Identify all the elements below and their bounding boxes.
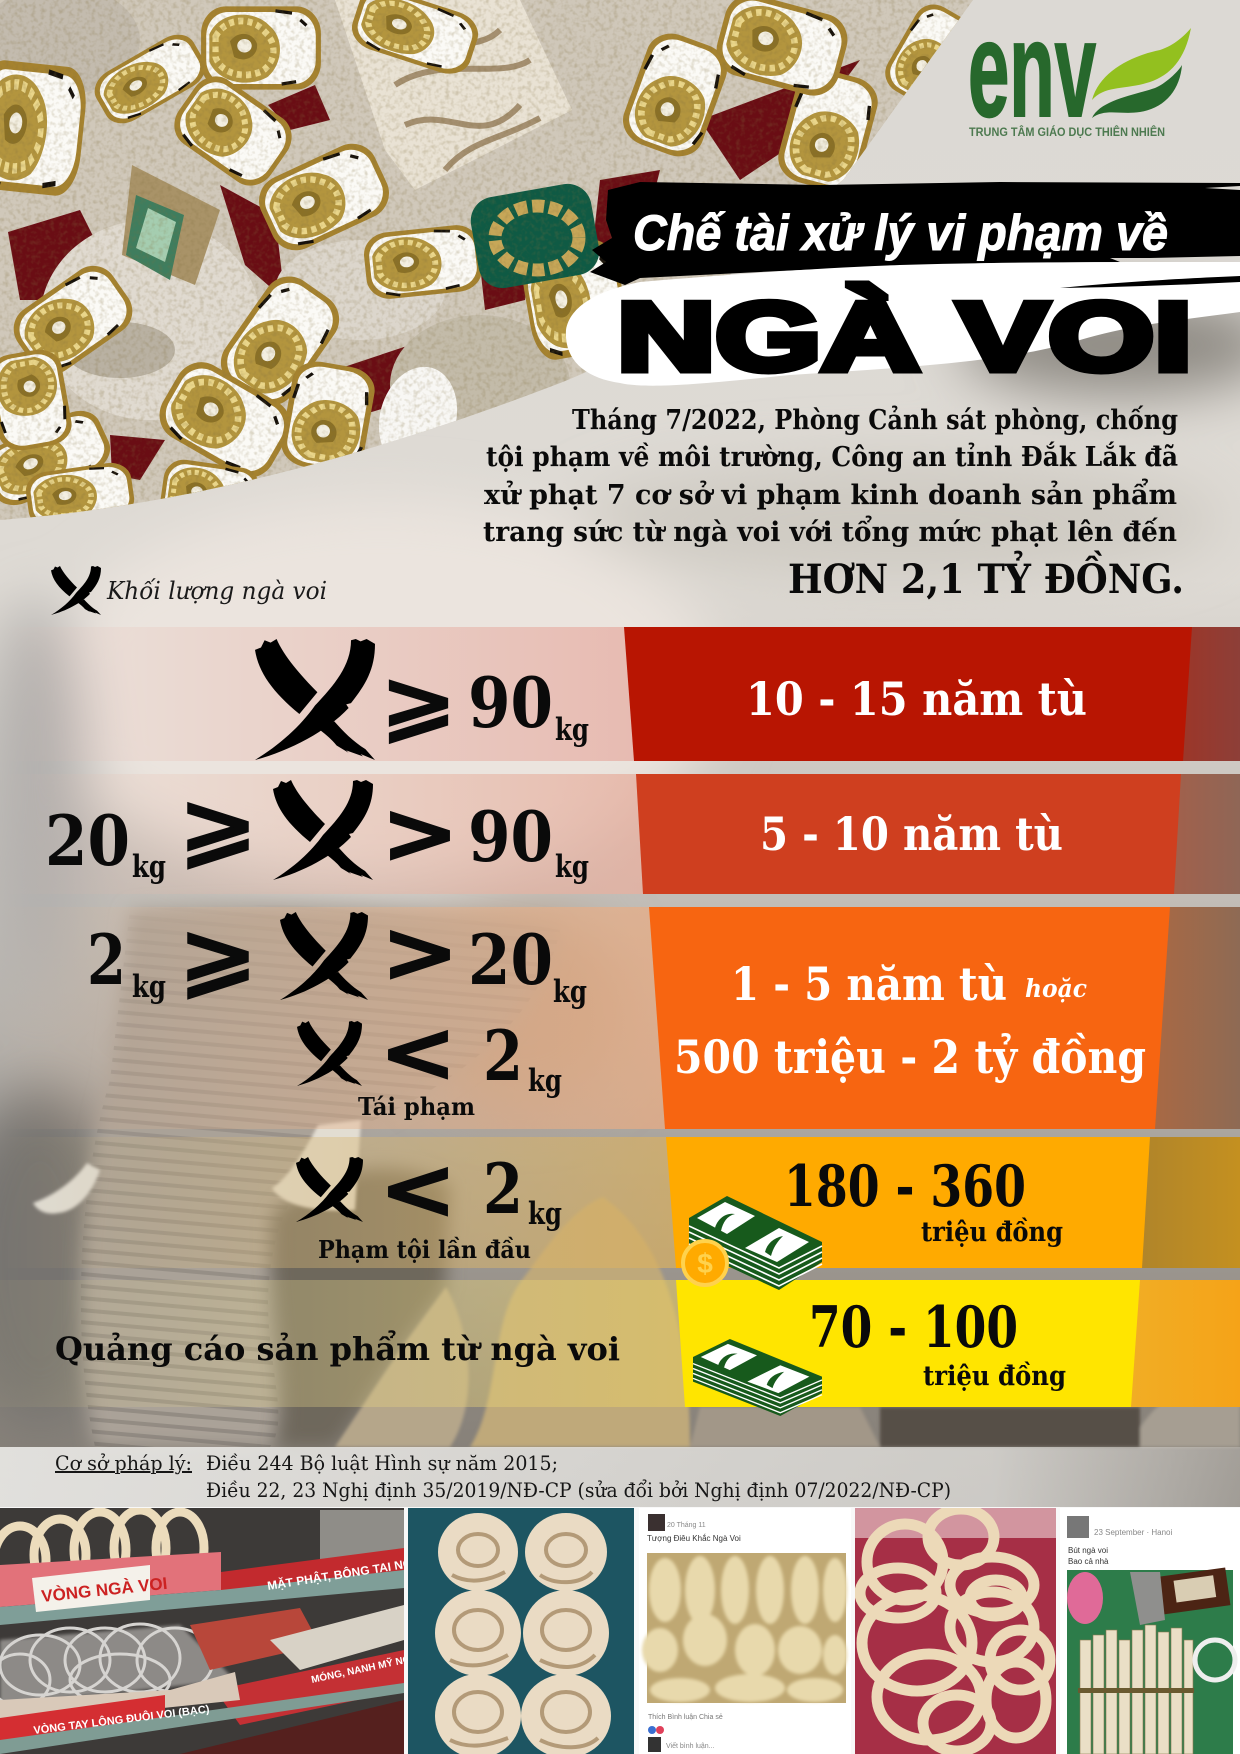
carved ivory	[0, 0, 572, 429]
intro paragraph: tội phạm về môi trường, Công an tỉnh Đắk Lắk đã	[486, 440, 1178, 473]
row 3: 2 to 20 kg or repeat offence: kg	[132, 969, 166, 1005]
dark gap behind trunk	[271, 1169, 450, 1447]
row 1: 90 kg and over: ⩾	[380, 657, 457, 750]
row 2: 20 to 90 kg: 5 - 10 năm tù	[760, 807, 1063, 861]
shop label: MẶT PHẬT, BÔNG TAI NGÀ VOI	[266, 1550, 445, 1593]
icon: green leaf	[1092, 28, 1191, 118]
row 5: advertising ivory: 70 - 100	[809, 1294, 1018, 1361]
legal basis: Điều 22, 23 Nghị định 35/2019/NĐ-CP (sửa đổi bởi Nghị định 07/2022/NĐ-CP)	[206, 1478, 951, 1502]
legal basis: Điều 244 Bộ luật Hình sự năm 2015;	[206, 1451, 558, 1475]
photo: social post of statues: 20 Tháng 11	[667, 1522, 706, 1529]
row 3: 2 to 20 kg or repeat offence: kg	[553, 974, 587, 1010]
penalty box	[666, 1137, 1150, 1268]
row 3: 2 to 20 kg or repeat offence: ⩾	[178, 908, 258, 1006]
row 3: 2 to 20 kg or repeat offence: 1 - 5 năm tù	[731, 957, 1007, 1011]
row 5: advertising ivory	[0, 1280, 1240, 1407]
shop sign: VÒNG NGÀ VOI	[40, 1574, 168, 1606]
row 3: 2 to 20 kg or repeat offence: hoặc	[1025, 974, 1087, 1003]
row 4: under 2 kg first offence: <	[379, 1140, 457, 1238]
row 3: 2 to 20 kg or repeat offence: >	[381, 903, 459, 1001]
white brush stroke	[566, 262, 1240, 386]
photo: ivory rings and carvings	[0, 0, 1000, 533]
row 5: advertising ivory: triệu đồng	[923, 1360, 1066, 1392]
row 3: 2 to 20 kg or repeat offence: <	[379, 1003, 457, 1101]
intro paragraph: trang sức từ ngà voi với tổng mức phạt lên đến	[483, 514, 1177, 548]
icon: cash stack with coin	[683, 1196, 822, 1290]
row 3: 2 to 20 kg or repeat offence: 2	[483, 1016, 523, 1097]
intro paragraph: xử phạt 7 cơ sở vi phạm kinh doanh sản phẩm	[484, 477, 1177, 511]
row 2: 20 to 90 kg: >	[381, 784, 459, 882]
silver bangles	[0, 1624, 235, 1706]
intro paragraph	[483, 404, 1184, 603]
row 3: 2 to 20 kg or repeat offence: Tái phạm	[358, 1092, 475, 1121]
elephant trunk	[72, 898, 526, 1447]
row 3: 2 to 20 kg or repeat offence: 20	[468, 920, 553, 1001]
row 3: 2 to 20 kg or repeat offence: 2	[87, 920, 126, 1001]
row 3: 2 to 20 kg or repeat offence	[0, 903, 1240, 1129]
legend: ivory weight	[51, 566, 327, 615]
row 2: 20 to 90 kg: 90	[468, 797, 553, 878]
penalty box	[649, 907, 1170, 1129]
dark red velvet	[8, 20, 860, 480]
row 5: advertising ivory: Quảng cáo sản phẩm từ ngà voi	[55, 1329, 620, 1368]
shop sign	[32, 1565, 168, 1612]
logo tagline: TRUNG TÂM GIÁO DỤC THIÊN NHIÊN	[969, 126, 1165, 139]
elephant tusks	[33, 1163, 100, 1214]
row 4: under 2 kg first offence	[0, 1137, 1240, 1268]
photo: social post of statues: Viết bình luận...	[666, 1741, 715, 1750]
photo: social post of ivory pens: Bao cả nhà	[1068, 1557, 1109, 1566]
row 1: 90 kg and over: 10 - 15 năm tù	[746, 672, 1087, 726]
penalty box	[624, 627, 1192, 761]
row 2: 20 to 90 kg: ⩾	[178, 778, 258, 876]
legal basis	[0, 1447, 1240, 1507]
title line 1: Chế tài xử lý vi phạm về	[633, 205, 1168, 261]
title banner	[566, 182, 1240, 391]
intro paragraph: Tháng 7/2022, Phòng Cảnh sát phòng, chống	[572, 404, 1178, 436]
texture grain	[0, 0, 1000, 530]
photo: social post of statues: Tượng Điêu Khắc Ngà Voi	[647, 1534, 741, 1543]
photo: social post of ivory pens	[1060, 1508, 1240, 1754]
green enamel ring	[470, 184, 599, 288]
elephant legs	[335, 1197, 1240, 1447]
row 4: under 2 kg first offence: triệu đồng	[921, 1216, 1063, 1248]
fine total: HƠN 2,1 TỶ ĐỒNG.	[788, 551, 1184, 603]
green gem ring	[122, 165, 220, 285]
shop label: VÒNG TAY LÔNG ĐUÔI VOI (BẠC)	[33, 1702, 210, 1737]
row 4: under 2 kg first offence: 180 - 360	[784, 1153, 1026, 1220]
penalty box	[636, 774, 1181, 894]
photo strip	[0, 1507, 1240, 1754]
black brush stroke	[590, 182, 1240, 285]
row 1: 90 kg and over	[0, 627, 1240, 761]
title line 2: NGÀ VOI	[617, 282, 1192, 391]
row 4: under 2 kg first offence: 2	[483, 1149, 523, 1230]
row 2: 20 to 90 kg: kg	[132, 849, 166, 885]
legend: ivory weight: Khối lượng ngà voi	[106, 577, 327, 605]
row 4: under 2 kg first offence: kg	[528, 1196, 562, 1232]
row 1: 90 kg and over: kg	[555, 712, 589, 748]
photo: carved dragons	[408, 1508, 634, 1754]
gold rings	[0, 0, 982, 533]
row 2: 20 to 90 kg: 20	[45, 801, 130, 882]
icon: cash stack	[693, 1339, 822, 1416]
white cabochon	[378, 366, 458, 444]
photo: social post of ivory pens: 23 September · Hanoi	[1094, 1528, 1172, 1537]
photo: social post of statues: Thích Bình luận Chia sẻ	[648, 1714, 723, 1721]
row 1: 90 kg and over: 90	[468, 663, 553, 744]
row 3: 2 to 20 kg or repeat offence: kg	[528, 1063, 562, 1099]
photo: shop shelves	[0, 1508, 445, 1754]
shop label: MÓNG, NANH MỸ NGHỆ	[310, 1649, 425, 1686]
row 2: 20 to 90 kg	[0, 774, 1240, 894]
penalty box	[676, 1280, 1140, 1407]
legal basis: Cơ sở pháp lý:	[55, 1451, 192, 1475]
icon: cash stack with coin: $	[697, 1248, 713, 1279]
row 4: under 2 kg first offence: Phạm tội lần đầu	[318, 1235, 531, 1264]
photo: ivory bangles	[855, 1508, 1056, 1754]
photo: social post of ivory pens: Bút ngà voi	[1068, 1546, 1108, 1555]
photo: social post of statues	[639, 1508, 851, 1754]
row 2: 20 to 90 kg: kg	[555, 849, 589, 885]
black sliver	[1060, 276, 1240, 288]
row 3: 2 to 20 kg or repeat offence: 500 triệu - 2 tỷ đồng	[674, 1030, 1146, 1084]
